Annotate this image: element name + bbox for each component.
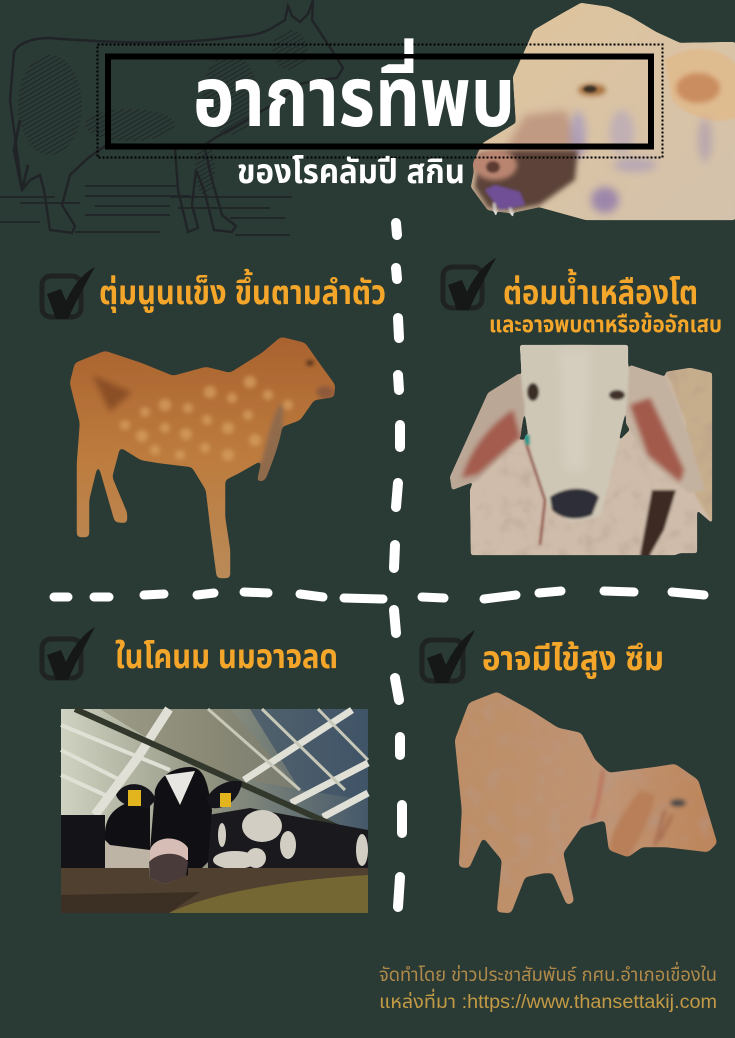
- panel: fever and drowsiness: [422, 630, 717, 913]
- photo: white cow: [450, 345, 712, 555]
- footer: credits: [379, 961, 717, 1013]
- heading: lumps: ตุ่มนูนแข็ง ขึ้นตามลำตัว: [99, 268, 386, 313]
- photo: thin calf: [455, 692, 717, 913]
- icon: checkbox: [42, 627, 95, 680]
- title frame: solid inner border: [108, 56, 651, 146]
- title: อาการที่พบ: [193, 38, 515, 144]
- panel: reduced milk: [42, 627, 368, 913]
- heading: milk: ในโคนม นมอาจลด: [115, 638, 338, 676]
- icon: checkbox: [422, 630, 475, 683]
- heading: lymph nodes: ต่อมน้ำเหลืองโต: [503, 268, 698, 312]
- credit line: จัดทำโดย ข่าวประชาสัมพันธ์ กศน.อำเภอเขื่องใน: [379, 961, 717, 986]
- source line: แหล่งที่มา :https://www.thansettakij.com: [379, 988, 717, 1013]
- icon: checkbox: [443, 258, 496, 310]
- photo: cow head with lesions: [471, 3, 735, 220]
- heading: fever: อาจมีไข้สูง ซึม: [482, 640, 664, 679]
- subtitle: ของโรคลัมปี สกิน: [237, 153, 465, 191]
- divider: vertical dashes: [394, 223, 402, 907]
- panel: lumps on body: [42, 267, 386, 578]
- title frame: dotted outer border: [98, 44, 662, 158]
- panel: swollen lymph nodes: [443, 258, 722, 555]
- divider: horizontal dashes: [54, 591, 704, 599]
- icon: checkbox: [42, 267, 95, 319]
- photo: dairy cows in barn: [61, 709, 368, 913]
- illustration: cow sketch: [0, 0, 343, 235]
- photo: calf with lumps: [70, 337, 335, 578]
